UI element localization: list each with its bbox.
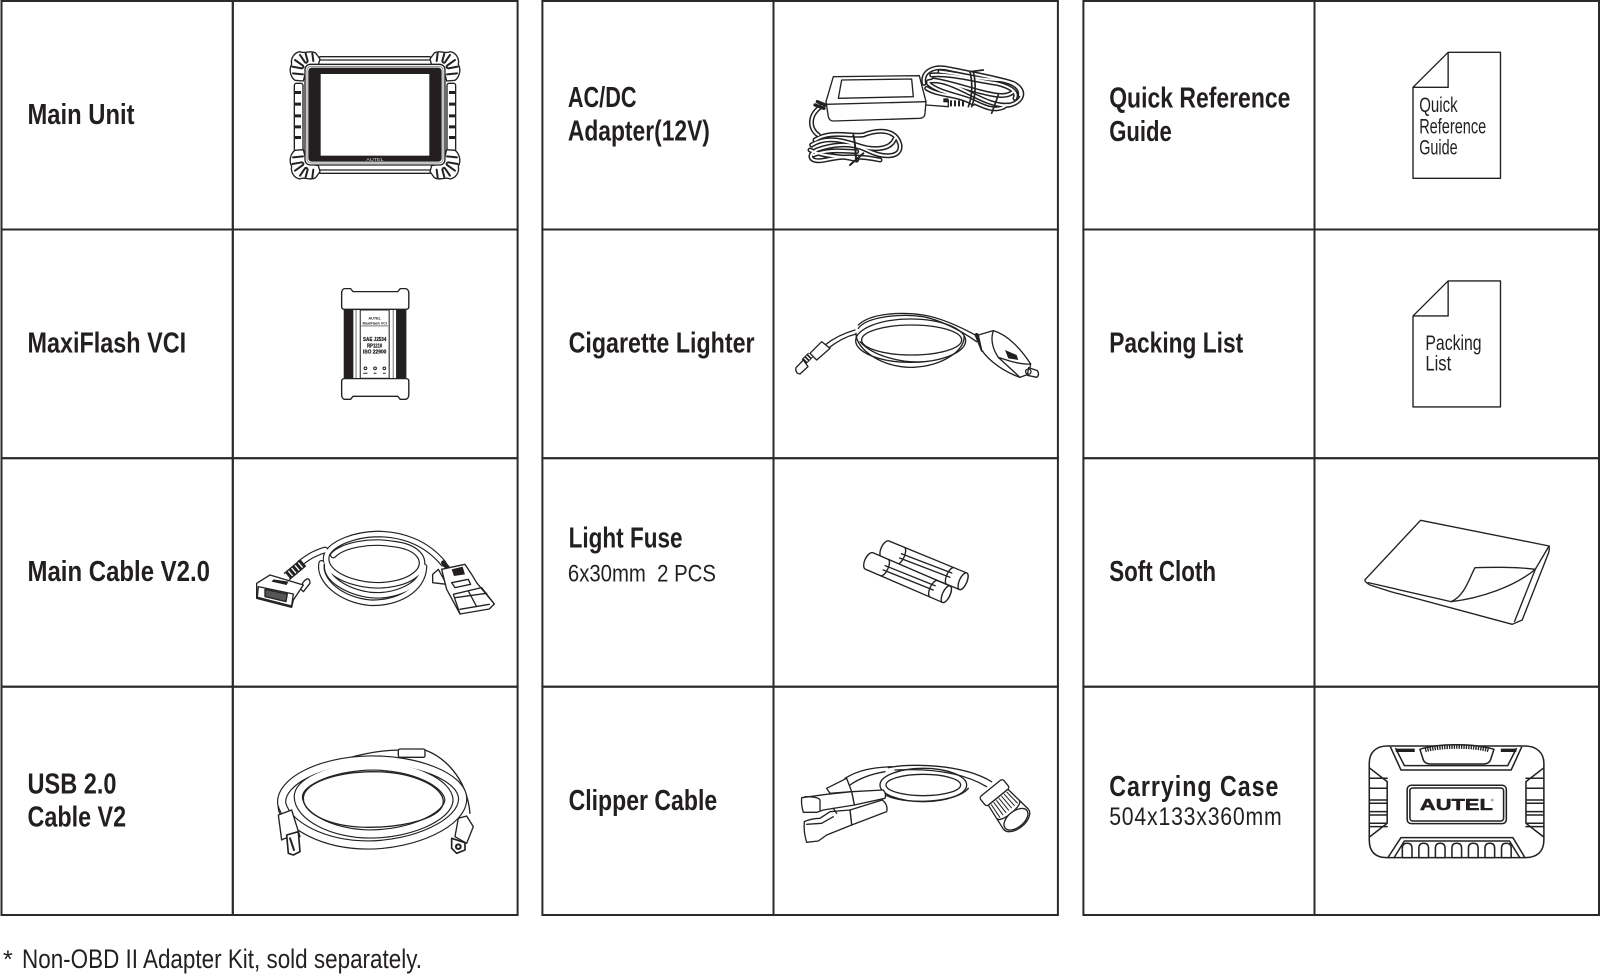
icon: guide document: Quick — [1419, 94, 1458, 117]
label: AC/DC Adapter(12V): Adapter(12V) — [568, 116, 710, 148]
cell: Carrying Case — [1083, 687, 1314, 915]
label: Main Cable V2.0: Main Cable V2.0 — [28, 556, 210, 588]
cell: Main Unit picture — [233, 1, 518, 230]
label: Cigarette Lighter: Cigarette Lighter — [569, 328, 755, 360]
cell: Main Cable V2.0 — [2, 458, 233, 687]
icon: carrying case: AUTEL — [1420, 797, 1494, 814]
icon: glass fuses — [861, 539, 970, 604]
icon: packing list document: Packing — [1425, 332, 1482, 355]
label: Packing List: Packing List — [1109, 328, 1243, 360]
icon: clipper cable — [802, 765, 1034, 842]
label: Quick Reference Guide: Quick Reference — [1109, 82, 1290, 114]
cell: MaxiFlash VCI — [2, 230, 233, 458]
cell: USB 2.0 Cable V2 — [2, 687, 233, 915]
label: Light Fuse 6x30mm 2 PCS — [568, 523, 716, 587]
icon: VCI device — [342, 289, 409, 399]
cell: Quick Reference Guide — [1083, 1, 1314, 230]
icon: guide document — [1413, 52, 1500, 178]
label: Carrying Case 504x133x360mm — [1109, 769, 1282, 830]
cell: Cigarette Lighter — [542, 230, 774, 458]
footnote: Non-OBD II Adapter Kit, sold separately. — [22, 944, 422, 974]
label: AC/DC Adapter(12V) — [568, 82, 710, 148]
cell: Soft Cloth — [1083, 458, 1314, 687]
icon: packing list document — [1413, 281, 1500, 407]
panel: column 3 accessories — [1083, 1, 1599, 915]
cell: MaxiFlash VCI picture — [233, 230, 518, 458]
icon: packing list document: List — [1425, 353, 1451, 376]
label: Clipper Cable: Clipper Cable — [569, 785, 717, 817]
icon: USB cable — [278, 749, 473, 855]
cell: cloth picture — [1314, 458, 1599, 687]
label: Carrying Case 504x133x360mm: Carrying Case — [1109, 769, 1278, 803]
cell: Main Cable picture — [233, 458, 518, 687]
icon: VCI device: RP1210 — [367, 343, 382, 349]
icon: carrying case — [1369, 745, 1544, 858]
label: Main Unit: Main Unit — [28, 99, 135, 131]
icon: AC/DC adapter — [810, 68, 1022, 165]
cell: Packing List — [1083, 230, 1314, 458]
label: USB 2.0 Cable V2 — [28, 768, 126, 834]
label: Light Fuse 6x30mm 2 PCS: 6x30mm 2 PCS — [568, 560, 716, 587]
cell: USB cable picture — [233, 687, 518, 915]
cell: fuse picture — [774, 458, 1058, 687]
cell: packing list picture — [1314, 230, 1599, 458]
cell: Main Unit — [2, 1, 233, 230]
label: Light Fuse 6x30mm 2 PCS: Light Fuse — [569, 523, 683, 555]
icon: VCI device: AUTEL — [368, 316, 382, 320]
icon: VCI device: ISO 22900 — [363, 350, 387, 356]
icon: VCI device: SAE J2534 — [363, 337, 387, 343]
label: Carrying Case 504x133x360mm: 504x133x360mm — [1109, 802, 1282, 830]
panel: column 2 accessories — [542, 1, 1058, 915]
icon: guide document: Guide — [1419, 137, 1458, 160]
icon: VCI device: MaxiFlash VCI — [363, 320, 387, 325]
cell: adapter picture — [774, 1, 1058, 230]
cell: AC/DC Adapter — [542, 1, 774, 230]
panel: column 1 accessories — [2, 1, 518, 915]
label: USB 2.0 Cable V2: Cable V2 — [28, 802, 126, 834]
label: MaxiFlash VCI: MaxiFlash VCI — [28, 328, 186, 360]
footnote: * — [3, 946, 13, 974]
icon: cigarette lighter cable — [796, 313, 1038, 377]
cell: carrying case picture — [1314, 687, 1599, 915]
cell: Light Fuse — [542, 458, 774, 687]
cell: Clipper Cable — [542, 687, 774, 915]
label: Soft Cloth: Soft Cloth — [1109, 556, 1216, 588]
label: Quick Reference Guide — [1109, 82, 1290, 148]
label: Quick Reference Guide: Guide — [1109, 116, 1172, 148]
label: USB 2.0 Cable V2: USB 2.0 — [28, 768, 116, 800]
icon: guide document: Reference — [1419, 115, 1486, 138]
icon: soft cloth — [1365, 520, 1549, 624]
icon: tablet main unit — [290, 52, 460, 179]
cell: clipper cable picture — [774, 687, 1058, 915]
label: AC/DC Adapter(12V): AC/DC — [568, 82, 637, 114]
icon: main cable — [257, 534, 494, 614]
cell: guide picture — [1314, 1, 1599, 230]
cell: cigarette lighter picture — [774, 230, 1058, 458]
icon: tablet main unit: AUTEL — [366, 157, 384, 162]
